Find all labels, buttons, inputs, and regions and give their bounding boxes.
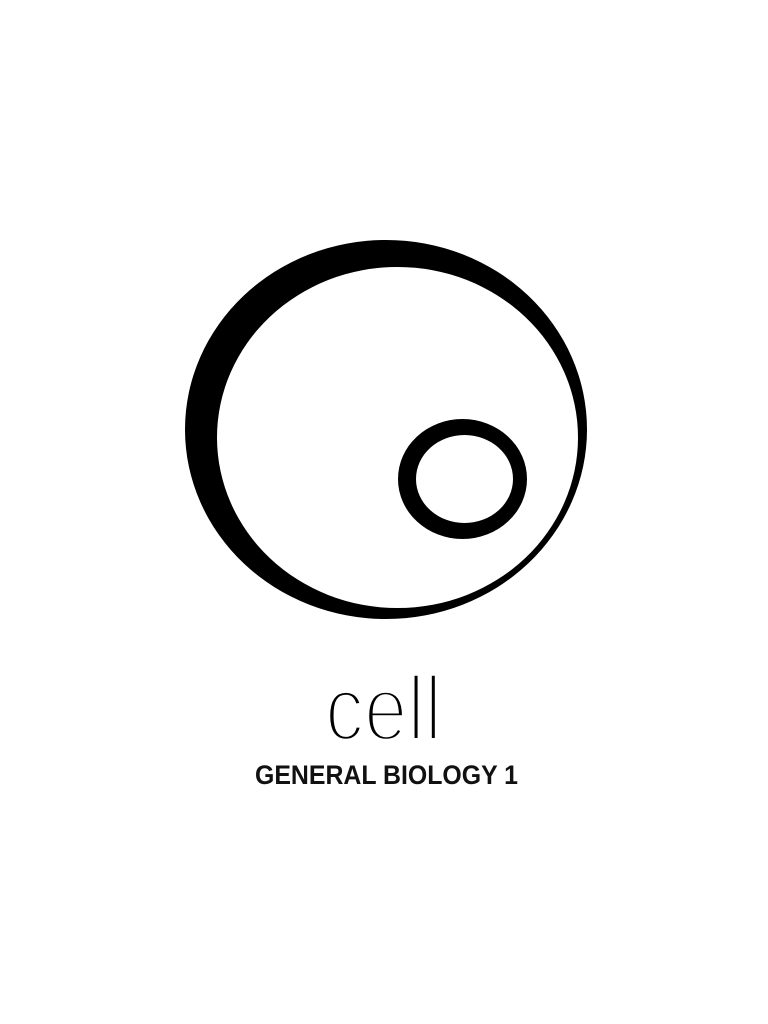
icon: nucleus ring <box>398 419 527 539</box>
subtitle: GENERAL BIOLOGY 1: GENERAL BIOLOGY 1 <box>255 760 518 790</box>
icon: outer cell membrane ring <box>185 240 587 619</box>
title: cell: cell <box>325 658 442 760</box>
